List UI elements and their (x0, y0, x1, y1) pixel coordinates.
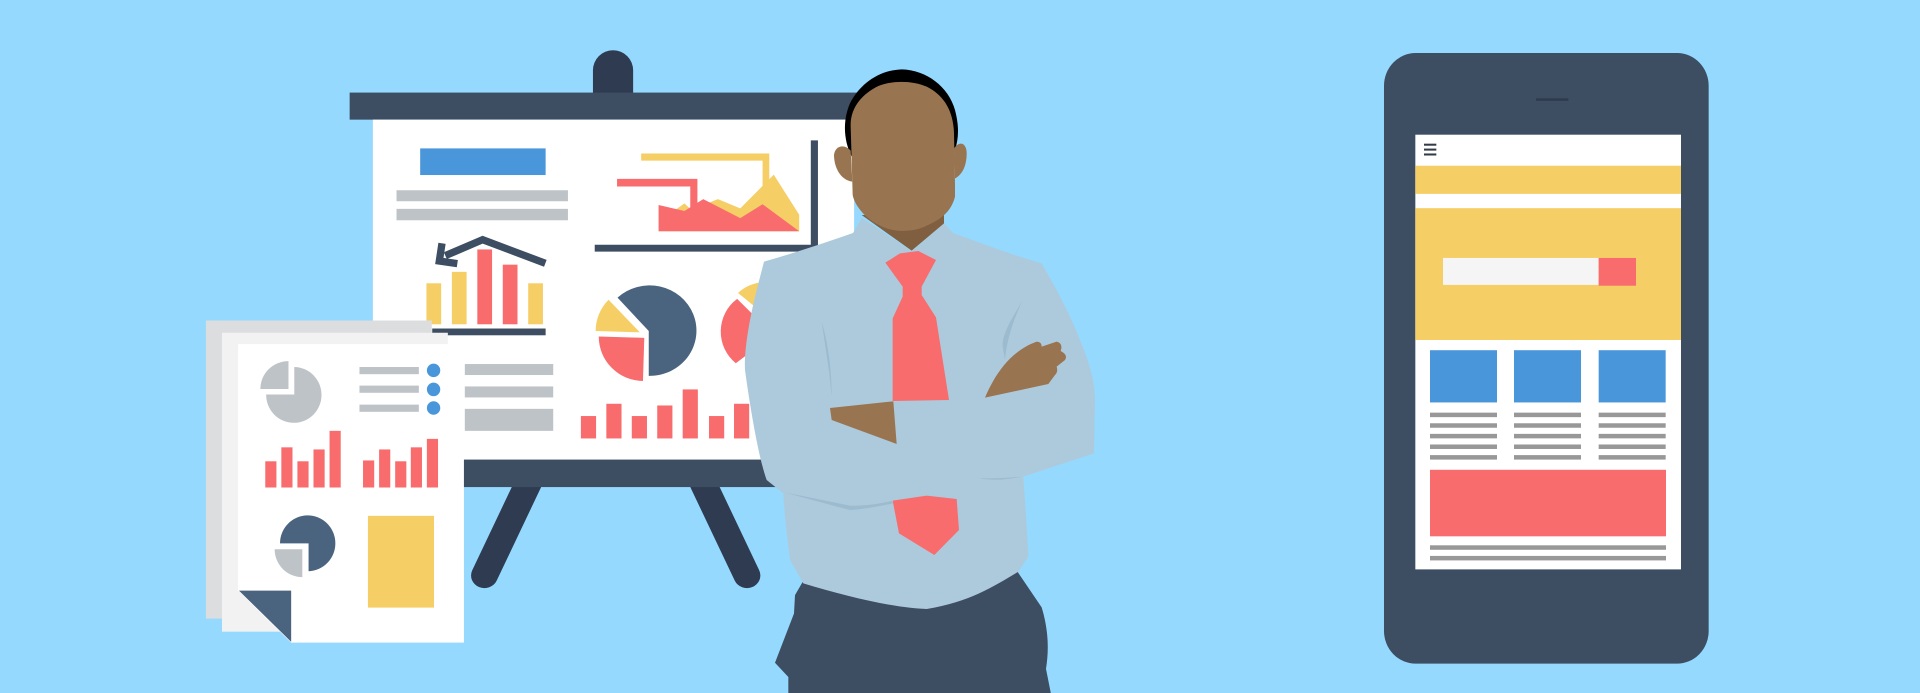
area line chart (595, 140, 818, 252)
dark pie slice (618, 285, 696, 376)
bar chart trend arrow (439, 240, 545, 264)
shirt (745, 218, 1095, 609)
yellow area (659, 175, 799, 231)
blue image cards (1430, 350, 1666, 402)
phone speaker (1536, 98, 1568, 101)
legend lines (359, 367, 419, 412)
phone screen (1415, 135, 1681, 569)
board hanger (593, 50, 633, 93)
right hand (985, 342, 1066, 398)
red banner (1430, 470, 1666, 536)
red area (659, 199, 799, 231)
back document sheet (206, 320, 432, 619)
blue heading block (420, 148, 546, 175)
document dark pie (275, 515, 335, 577)
document bar chart right (363, 439, 438, 488)
board bottom bar (403, 460, 805, 487)
document bar chart left (265, 431, 341, 488)
card text lines (1430, 413, 1666, 460)
face (851, 82, 955, 231)
left ear (834, 146, 852, 182)
smartphone (1384, 53, 1709, 664)
yellow slice (738, 282, 760, 311)
red series line (617, 179, 697, 208)
phone body (1384, 53, 1709, 664)
left hand (830, 401, 897, 444)
shirt and arms (745, 218, 1095, 609)
yellow nav band (1415, 166, 1681, 194)
hair (845, 69, 958, 157)
presentation board and documents (206, 50, 868, 643)
folded page corner (239, 591, 291, 642)
grey blocks beside document (465, 364, 553, 431)
yellow series line (641, 153, 769, 189)
red slice (721, 299, 756, 363)
front document sheet (238, 344, 464, 643)
legend dots (427, 364, 440, 415)
document yellow block (368, 516, 434, 608)
chart axes (595, 140, 818, 252)
pie chart two, partly hidden (721, 282, 760, 363)
board white panel (373, 120, 854, 460)
yellow pie slice (596, 300, 640, 332)
right ear (954, 144, 967, 178)
search button (1599, 258, 1636, 286)
easel legs (484, 482, 747, 575)
grey text lines (397, 190, 568, 220)
yellow hero block (1415, 208, 1681, 340)
head and neck (834, 69, 967, 251)
pie chart one (596, 285, 696, 381)
bar chart baseline (432, 329, 546, 335)
trousers (775, 570, 1053, 693)
tie upper (885, 251, 949, 401)
middle document sheet (222, 333, 448, 632)
grey pie chart (260, 361, 322, 423)
hamburger menu icon (1424, 144, 1436, 156)
tie lower (893, 496, 959, 555)
search input (1443, 258, 1599, 285)
bar chart bars (426, 249, 543, 324)
businessman figure (745, 69, 1095, 693)
board top bar (350, 93, 868, 120)
neck shadow (862, 215, 944, 251)
footer text lines (1430, 545, 1666, 560)
red bar row (581, 389, 749, 438)
shirt creases (785, 300, 1023, 510)
red pie slice (599, 337, 644, 381)
